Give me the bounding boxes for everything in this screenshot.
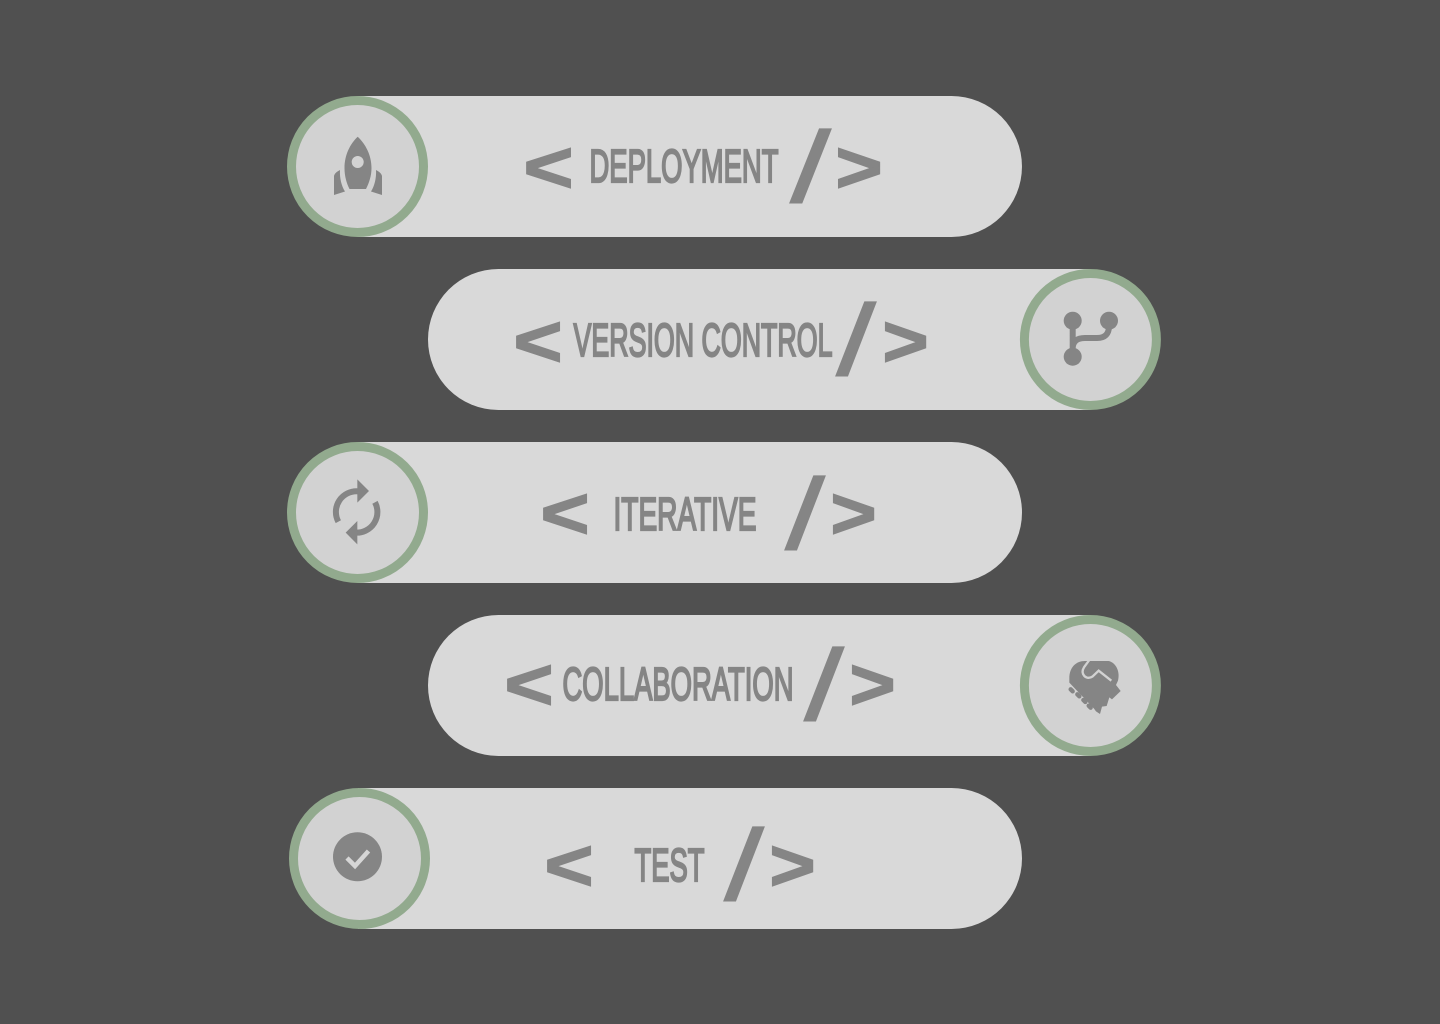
- label: deployment: <: [524, 128, 574, 208]
- label: deployment: DEPLOYMENT: [590, 140, 778, 192]
- label: version control: /: [836, 285, 877, 397]
- icon: handshake in ring: [1024, 620, 1156, 752]
- label: deployment: [524, 112, 882, 224]
- icon: git branch in ring: [1024, 274, 1156, 406]
- icon: check in ring: [294, 792, 426, 924]
- panel: deployment: [292, 96, 1022, 237]
- panel: iterative: [292, 442, 1022, 583]
- label: test: TEST: [634, 839, 704, 891]
- label: version control: >: [882, 302, 928, 382]
- label: deployment: >: [836, 128, 882, 208]
- label: collaboration: /: [804, 630, 845, 742]
- label: version control: <: [514, 302, 562, 382]
- label: deployment: /: [790, 112, 832, 224]
- label: test: /: [724, 810, 765, 922]
- label: iterative: <: [540, 474, 590, 554]
- pill: iterative: [358, 442, 1022, 583]
- pill: deployment: [358, 96, 1022, 237]
- label: collaboration: [504, 630, 896, 742]
- pill: test: [358, 788, 1022, 929]
- panel: collaboration: [428, 615, 1156, 756]
- label: iterative: >: [830, 474, 876, 554]
- pill: collaboration: [428, 615, 1091, 756]
- label: iterative: /: [785, 459, 826, 571]
- label: test: [544, 810, 816, 922]
- label: iterative: ITERATIVE: [614, 488, 756, 540]
- label: version control: VERSION CONTROL: [574, 314, 832, 366]
- panel: version control: [428, 269, 1156, 410]
- pill: version control: [428, 269, 1091, 410]
- label: collaboration: COLLABORATION: [562, 658, 794, 710]
- icon: rocket in ring: [292, 100, 424, 232]
- label: iterative: [540, 459, 876, 571]
- panel: test: [294, 788, 1022, 929]
- label: collaboration: >: [850, 645, 896, 725]
- label: version control: [514, 285, 928, 397]
- label: collaboration: <: [504, 645, 554, 725]
- label: test: <: [544, 826, 594, 906]
- label: test: >: [770, 826, 816, 906]
- icon: sync arrows in ring: [292, 446, 424, 578]
